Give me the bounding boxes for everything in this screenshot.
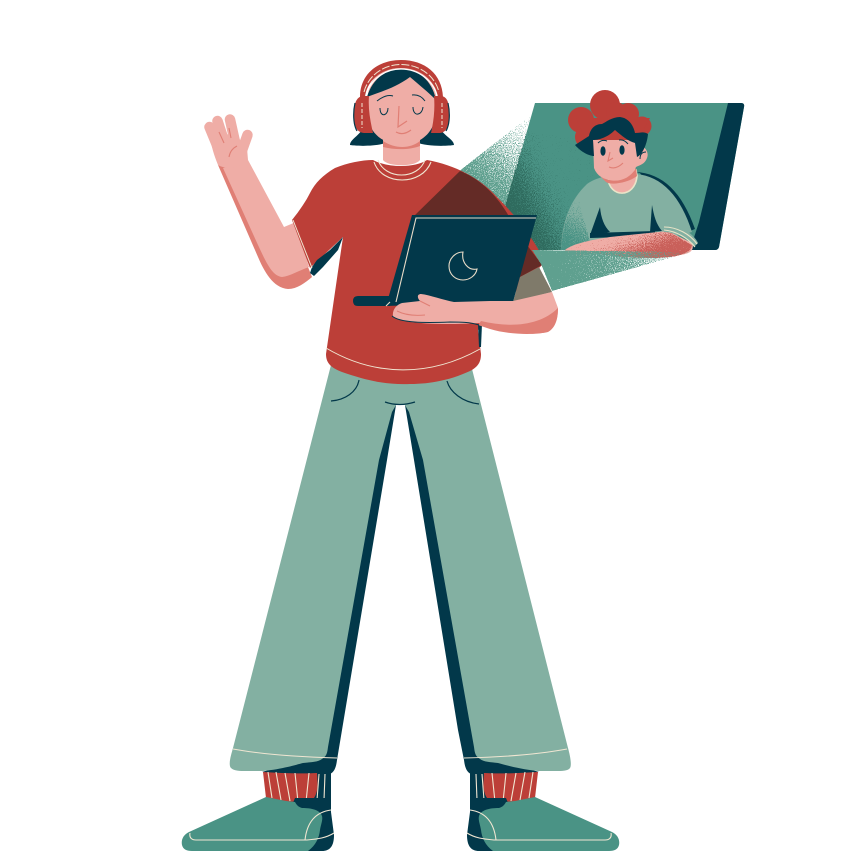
beam: lower, over white <box>532 250 692 291</box>
laptop: moon logo <box>449 252 477 280</box>
right sock <box>470 772 538 803</box>
waving arm <box>218 165 312 289</box>
laptop <box>353 215 537 306</box>
video call screen <box>493 103 744 250</box>
under-sleeve shadow <box>310 237 343 276</box>
waving arm and hand <box>210 120 312 289</box>
left shoe <box>182 797 334 851</box>
neck <box>383 138 420 165</box>
face <box>367 68 436 145</box>
beam shadow on shirt <box>414 171 552 302</box>
torso t-shirt <box>292 160 545 384</box>
headphones <box>354 60 449 133</box>
screen: dark side panel <box>690 103 744 250</box>
right shoe <box>467 797 619 851</box>
remote person: neck and collar <box>600 168 637 193</box>
main character <box>182 60 692 851</box>
remote person: arm resting <box>565 226 698 258</box>
projection beam: upper, over white <box>458 116 540 210</box>
remote person: red hair <box>568 90 652 150</box>
left sock <box>263 772 331 803</box>
remote person in the screen <box>561 90 698 258</box>
remote person: sweater <box>561 172 695 250</box>
trousers <box>230 365 571 771</box>
waving hand <box>210 120 248 168</box>
arm holding laptop <box>392 292 558 347</box>
screen: dark grain on left side <box>493 130 600 250</box>
remote person: head <box>575 117 648 180</box>
hair back <box>350 120 454 146</box>
trouser inner shadows <box>262 405 539 775</box>
